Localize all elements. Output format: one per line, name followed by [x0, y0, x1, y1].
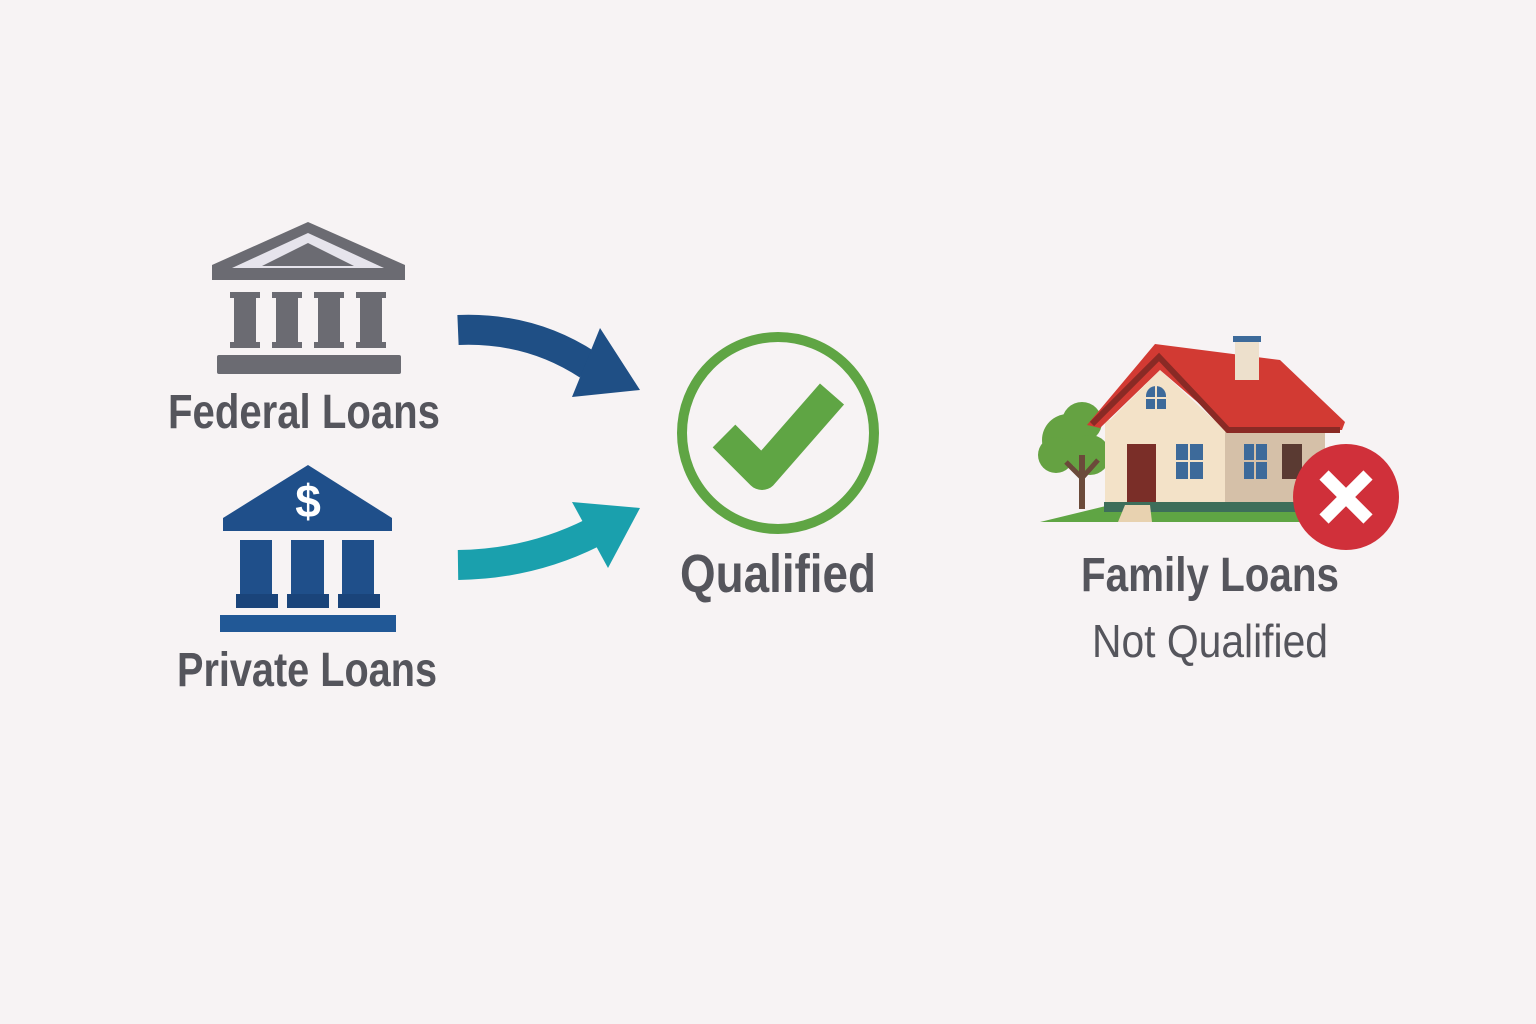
label: Private Loans: Private Loans — [177, 644, 437, 697]
icon: federal building — [212, 222, 405, 374]
arrow: federal to qualified — [458, 328, 640, 397]
label: Not Qualified: Not Qualified — [1092, 615, 1328, 667]
label: Family Loans: Family Loans — [1081, 549, 1339, 602]
label: Qualified: Qualified — [680, 544, 876, 604]
icon: house with tree — [1038, 336, 1345, 522]
icon: private bank: $ — [295, 475, 321, 527]
icon: private bank — [220, 465, 396, 632]
arrow: private to qualified — [458, 502, 640, 568]
icon: red x circle — [1293, 444, 1399, 550]
label: Federal Loans: Federal Loans — [168, 386, 440, 439]
icon: green check circle — [682, 337, 874, 529]
